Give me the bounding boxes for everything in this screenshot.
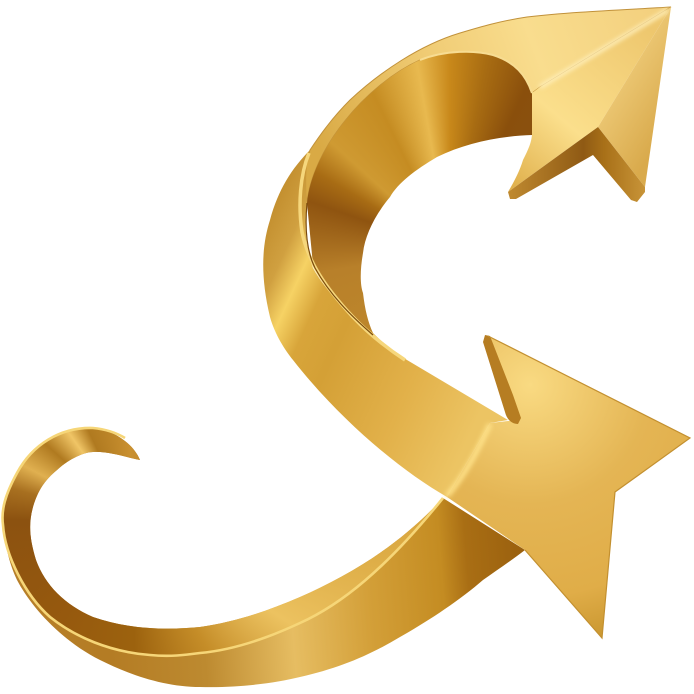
arch rim highlight — [420, 52, 532, 93]
upper arrow head right face — [598, 7, 671, 187]
upper arrow head thickness — [508, 127, 645, 202]
main ribbon — [263, 150, 508, 497]
lower arrow head face — [447, 336, 690, 638]
upper band top surface — [303, 7, 671, 203]
tail inner face — [4, 430, 432, 654]
main ribbon rim shadow — [306, 203, 373, 335]
lower arrow head prong thickness — [483, 335, 521, 424]
lower arrow head outline — [488, 336, 690, 638]
upper arrow head lower-left face — [508, 7, 671, 192]
tail underside — [3, 428, 525, 687]
upper arrow head ridge highlight — [540, 10, 668, 87]
main ribbon rim highlight — [300, 153, 405, 360]
ribbon crease highlight — [447, 424, 490, 496]
upper ribbon inner surface — [307, 52, 532, 333]
tail rim highlight — [3, 428, 443, 656]
